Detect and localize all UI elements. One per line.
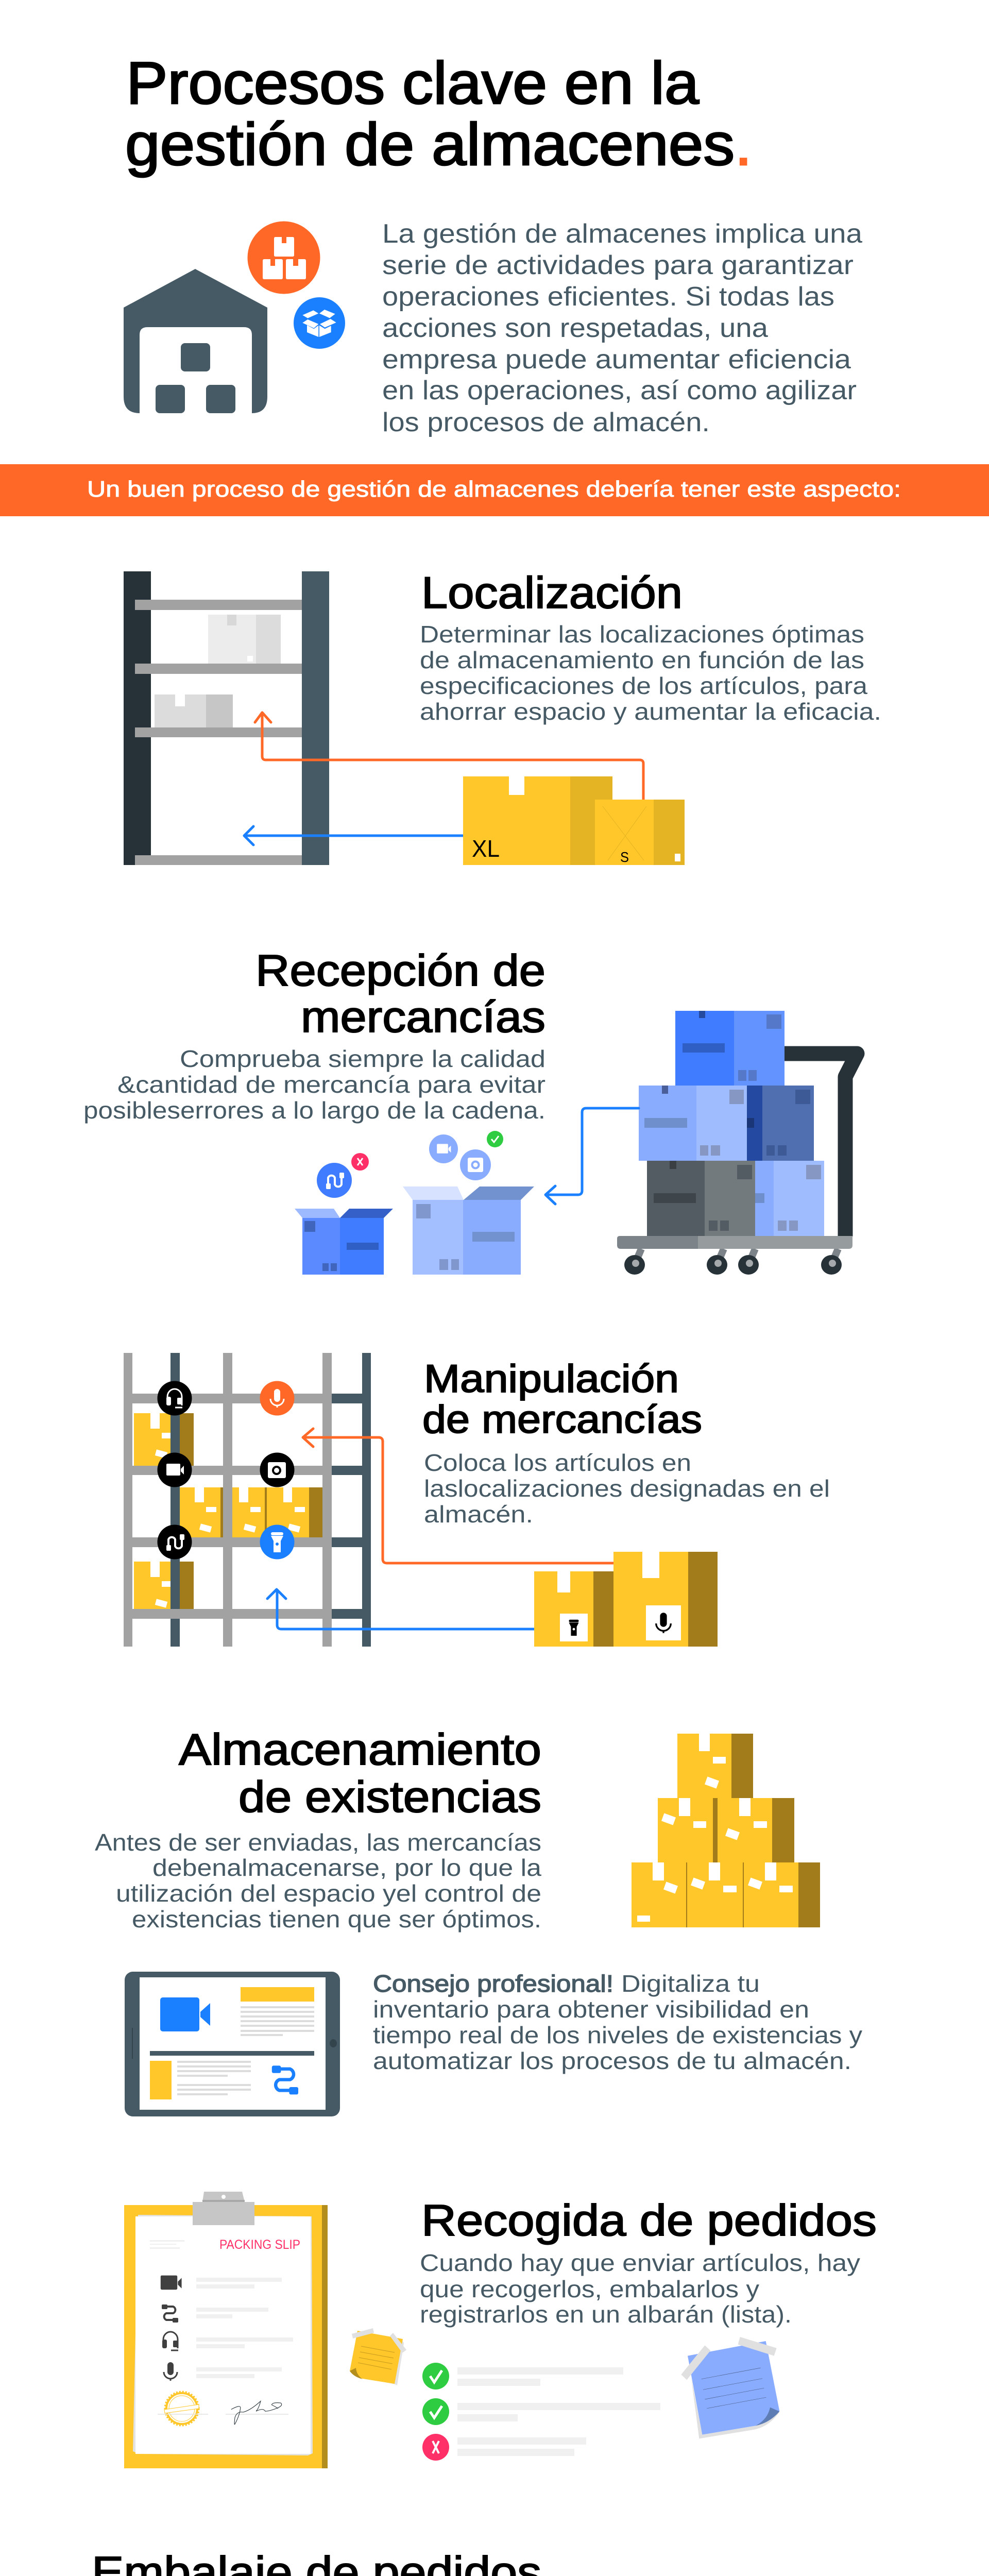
boxes XL and S: [463, 776, 685, 865]
sticky note: yellow: [350, 2328, 406, 2385]
body text: [420, 621, 881, 725]
body text: existencias tienen que ser óptimos.: [132, 1906, 541, 1933]
illustration: rack: [124, 1353, 371, 1647]
body text: especificaciones de los artículos, para: [420, 672, 867, 699]
checklist: [422, 2363, 660, 2461]
body text: de almacenamiento en función de las: [420, 647, 864, 673]
banner: [0, 464, 989, 516]
large blue box: [403, 1187, 534, 1275]
intro text: acciones son respetadas, una: [382, 313, 768, 343]
heading: Recepción de: [255, 946, 545, 995]
body text: [83, 1045, 545, 1124]
body text: Antes de ser enviadas, las mercancías: [95, 1829, 541, 1856]
tip text: Consejo profesional!: [373, 1970, 613, 1997]
body text: debenalmacenarse, por lo que la: [152, 1854, 541, 1881]
heading: [422, 1357, 702, 1442]
body text: [420, 2249, 860, 2328]
body text: Comprueba siempre la calidad: [180, 1045, 545, 1072]
boxes XL and S: S: [620, 849, 629, 865]
title: [125, 49, 752, 178]
intro text: [382, 219, 862, 437]
intro text: La gestión de almacenes implica una: [382, 219, 862, 249]
heading: [255, 946, 545, 1042]
icon: orange boxes circle: [247, 222, 320, 294]
intro text: en las operaciones, así como agilizar: [382, 376, 857, 405]
illustration: shelving with boxes: [124, 571, 643, 865]
panel: manipulación de mercancías: [124, 1353, 830, 1647]
body text: que recogerlos, embalarlos y: [420, 2276, 759, 2302]
heading: Localización: [421, 568, 683, 618]
illustration: cart with blue boxes: [617, 1011, 857, 1275]
icon: headset: [158, 1381, 192, 1416]
tip text: [373, 1970, 862, 2074]
arrow: [545, 1108, 639, 1204]
arrow: blue: [267, 1589, 534, 1629]
title: gestión de almacenes .: [125, 111, 752, 178]
arrow: orange: [303, 1429, 613, 1563]
packing slip label: PACKING SLIP: [219, 2238, 300, 2252]
body text: almacén.: [424, 1501, 533, 1528]
icon: reject mark: [351, 1153, 369, 1171]
panel: almacenamiento de existencias: [95, 1725, 862, 2116]
body text: Cuando hay que enviar artículos, hay: [420, 2249, 860, 2276]
intro text: operaciones eficientes. Si todas las: [382, 282, 834, 312]
heading: de existencias: [238, 1773, 541, 1822]
heading: Manipulación: [424, 1357, 679, 1401]
boxes with icons: [534, 1552, 718, 1647]
body text: ahorrar espacio y aumentar la eficacia.: [420, 698, 881, 725]
icon: route circle: [317, 1163, 352, 1198]
body text: &cantidad de mercancía para evitar: [117, 1071, 545, 1098]
body text: Determinar las localizaciones óptimas: [420, 621, 864, 648]
icon: video circle: [429, 1134, 458, 1163]
body text: utilización del espacio yel control de: [116, 1880, 541, 1907]
intro text: los procesos de almacén.: [382, 408, 710, 437]
icon: camera: [260, 1453, 295, 1487]
intro text: serie de actividades para garantizar: [382, 250, 854, 280]
icon: flashlight: [260, 1525, 295, 1559]
tip text: tiempo real de los niveles de existencias y: [373, 2022, 862, 2048]
body text: laslocalizaciones designadas en el: [424, 1475, 830, 1502]
body text: Coloca los artículos en: [424, 1449, 691, 1476]
icon: approve mark: [487, 1131, 503, 1147]
body text: registrarlos en un albarán (lista).: [420, 2301, 792, 2328]
icon: video: [158, 1453, 192, 1487]
icon: camera circle: [460, 1149, 491, 1180]
icon: cable: [158, 1525, 192, 1559]
panel: localización: [124, 568, 881, 865]
heading: mercancías: [301, 993, 545, 1042]
illustration: clipboard: [124, 2192, 328, 2468]
heading: de mercancías: [422, 1398, 702, 1442]
sticky note: blue: [681, 2337, 779, 2438]
body text: [95, 1829, 541, 1933]
banner: Un buen proceso de gestión de almacenes debería tener este aspecto:: [87, 477, 901, 502]
illustration: tablet: [125, 1972, 340, 2116]
heading: Recogida de pedidos: [421, 2196, 877, 2245]
heading: Almacenamiento: [179, 1725, 541, 1774]
body text: [424, 1449, 830, 1528]
title: Procesos clave en la: [126, 49, 699, 116]
body text: posibleserrores a lo largo de la cadena.: [83, 1097, 545, 1124]
heading: [179, 1725, 541, 1822]
panel: recogida de pedidos: [124, 2192, 877, 2468]
tip text: automatizar los procesos de tu almacén.: [373, 2047, 851, 2074]
icon: microphone: [260, 1381, 295, 1416]
illustration: stacked boxes: [632, 1734, 820, 1927]
small blue box: [295, 1209, 393, 1275]
icon: warehouse: [124, 269, 267, 413]
intro text: empresa puede aumentar eficiencia: [382, 345, 851, 375]
tip text: inventario para obtener visibilidad en: [373, 1996, 809, 2023]
tip text: Digitaliza tu: [621, 1970, 760, 1997]
panel: recepción de mercancías: [83, 946, 857, 1275]
boxes XL and S: XL: [472, 835, 500, 862]
icon: blue open box circle: [294, 297, 345, 349]
